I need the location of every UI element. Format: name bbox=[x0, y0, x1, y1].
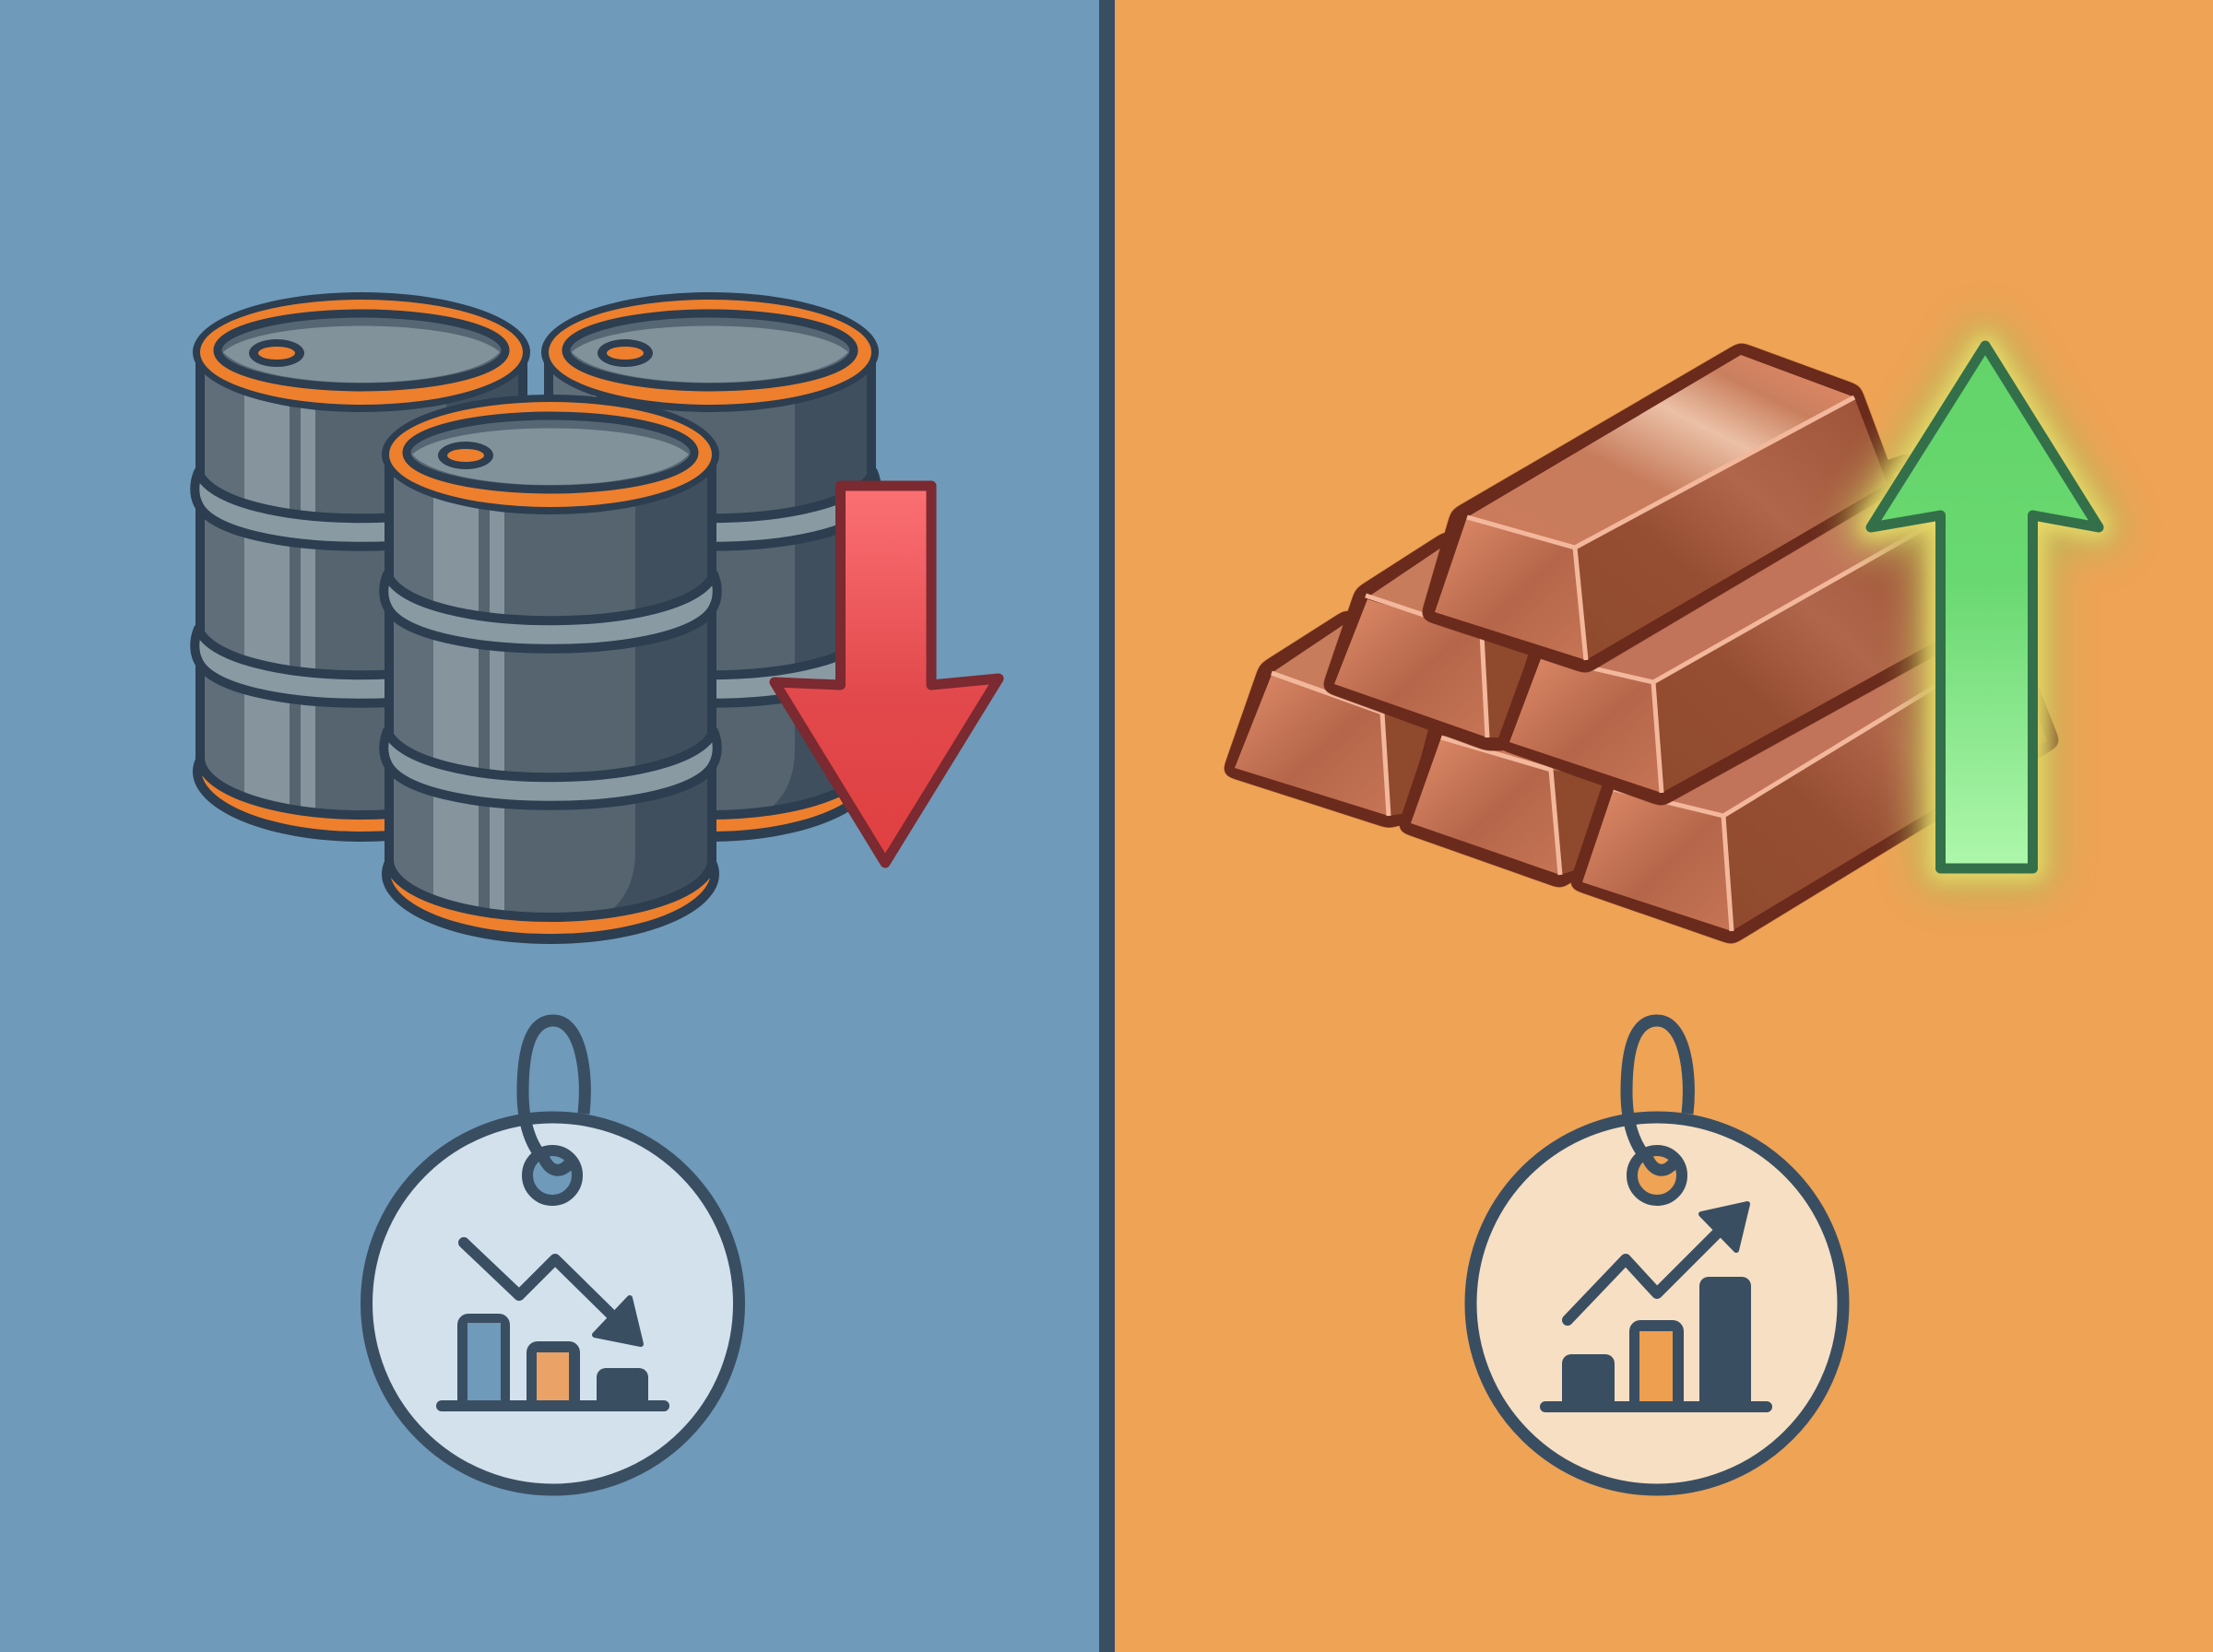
arrow: green price rise with glow bbox=[1871, 346, 2099, 868]
rising trend arrow bbox=[1568, 1204, 1747, 1320]
tag disc bbox=[367, 1117, 740, 1490]
centre divider bbox=[1099, 0, 1115, 1652]
back left barrel bbox=[193, 292, 530, 842]
ingot: middle left bbox=[1331, 539, 1531, 743]
icon: oil barrels bbox=[193, 292, 879, 944]
falling trend arrow bbox=[464, 1243, 641, 1344]
falling bars bbox=[442, 1314, 664, 1406]
ingot: bottom left bbox=[1231, 618, 1438, 820]
tag eyelet bbox=[1632, 1150, 1682, 1200]
tag string loop bbox=[1627, 1021, 1688, 1170]
price tag: falling oil chart bbox=[367, 1021, 740, 1490]
tag eyelet bbox=[527, 1150, 577, 1200]
ingot: top bbox=[1429, 350, 1889, 666]
ingot: middle right bbox=[1505, 461, 1964, 798]
front barrel bbox=[382, 395, 719, 944]
price tag: rising copper chart bbox=[1471, 1021, 1843, 1490]
arrow: red price fall bbox=[775, 486, 999, 863]
panel: oil background bbox=[0, 0, 1103, 1652]
ingot: bottom right bbox=[1578, 636, 2052, 937]
rising bars bbox=[1545, 1277, 1767, 1407]
ingot: bottom middle bbox=[1406, 719, 1614, 880]
tag disc bbox=[1471, 1117, 1843, 1490]
tag string loop bbox=[523, 1021, 585, 1170]
back right barrel bbox=[541, 292, 879, 842]
icon: copper ingots bbox=[1231, 350, 2052, 937]
panel: copper background bbox=[1111, 0, 2213, 1652]
